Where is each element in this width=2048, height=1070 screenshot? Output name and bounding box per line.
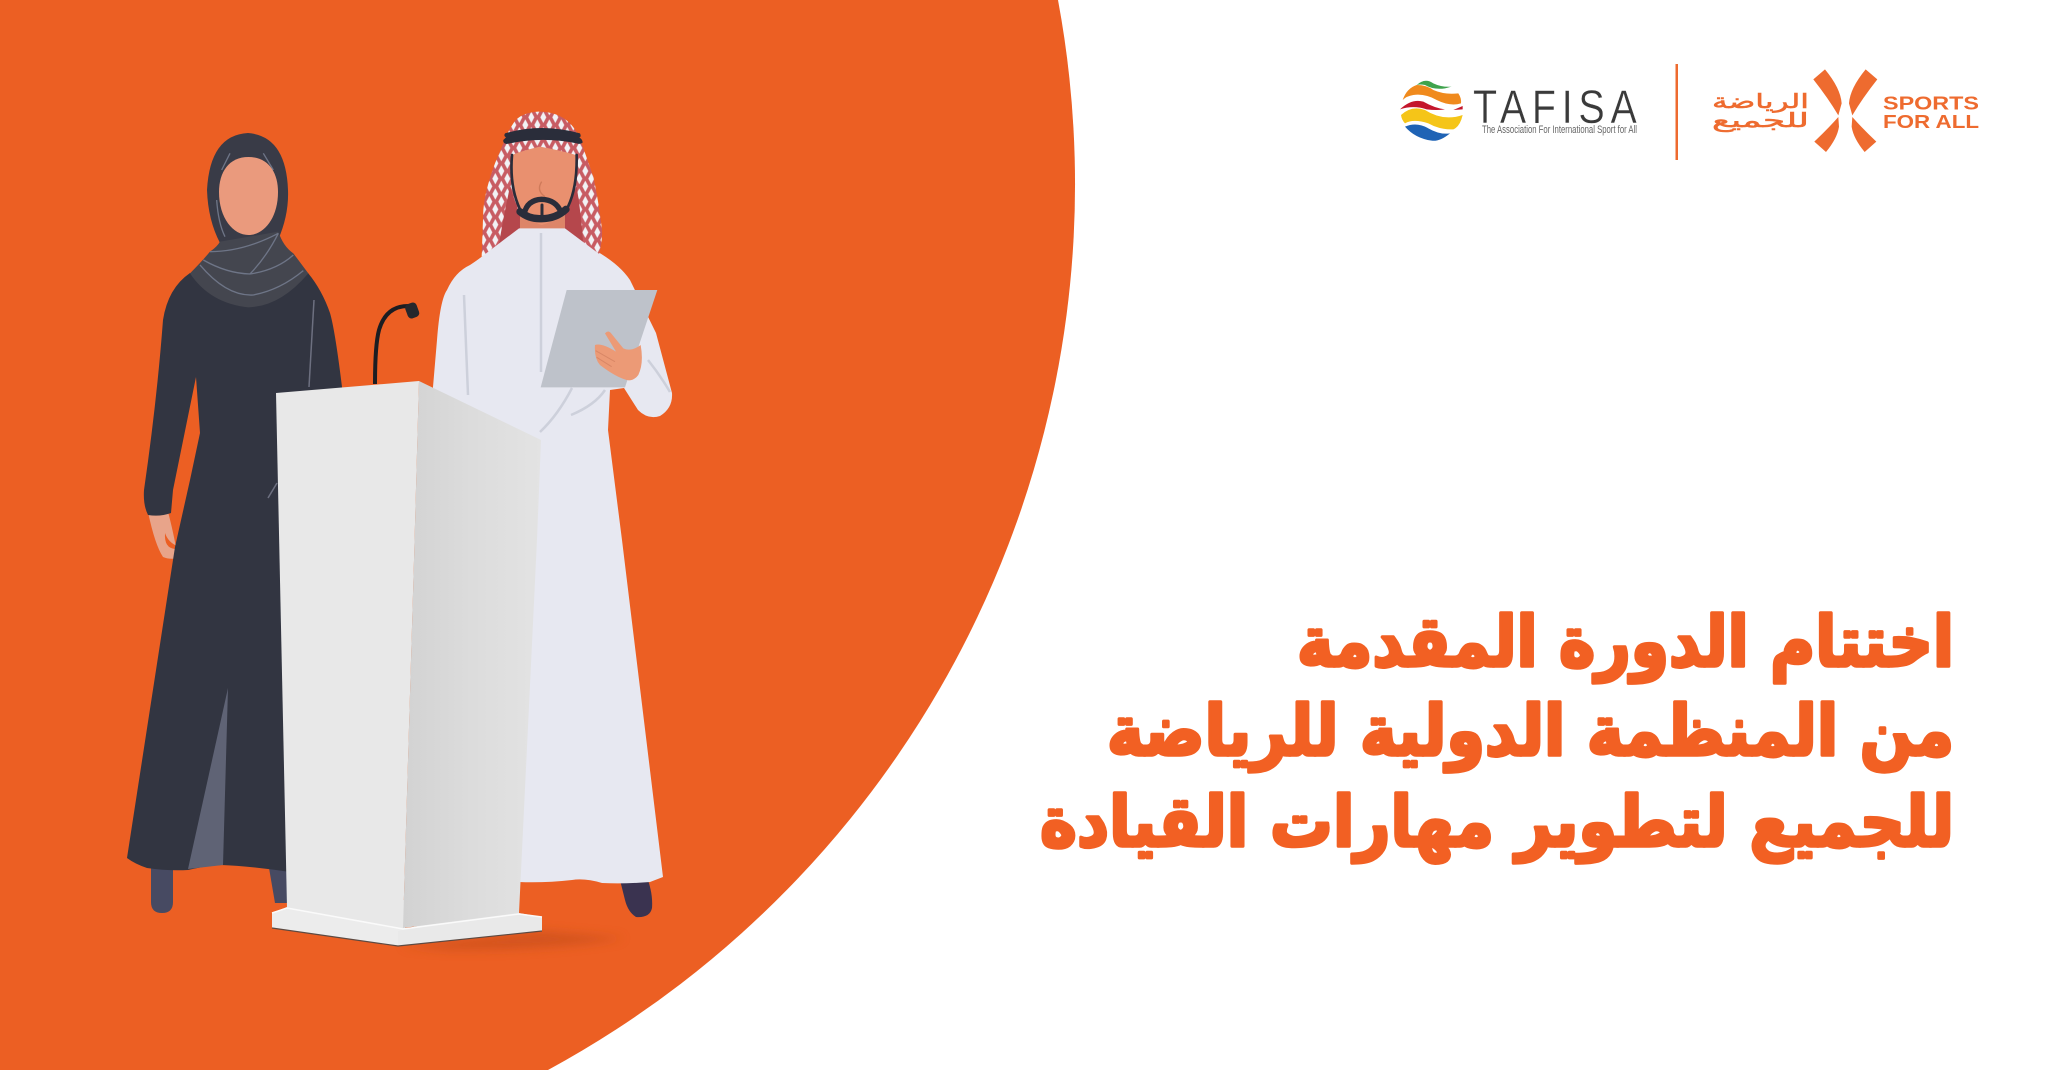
logo: Arabic name: [1712, 89, 1809, 132]
scarf fold lines: [200, 153, 303, 295]
heading: من المنظمة الدولية للرياضة: [1107, 690, 1954, 772]
figure: woman in abaya: [127, 133, 342, 913]
man hand: [595, 331, 642, 380]
logo: Arabic name: الرياضة: [1712, 89, 1809, 113]
logo: TAFISA tagline: The Association For International Sport for All: [1482, 124, 1637, 136]
figure: man in thobe: [433, 112, 672, 917]
background: orange circle: [0, 0, 1075, 1070]
man head: [470, 112, 618, 268]
nose line: [539, 182, 545, 197]
podium base: [272, 900, 542, 946]
podium base top edge highlight: [272, 908, 542, 929]
podium: [272, 381, 542, 946]
man shoe: [620, 880, 652, 917]
heading: اختتام الدورة المقدمة: [1297, 601, 1954, 684]
abaya fold lines: [268, 300, 314, 498]
woman abaya: [127, 273, 342, 872]
man face: [512, 147, 576, 225]
ghutra: [482, 112, 602, 257]
logos: [1400, 64, 1979, 160]
collar: [470, 228, 618, 268]
podium shadow: [400, 931, 625, 950]
woman shoes: [151, 868, 289, 913]
paper and hand: [541, 290, 657, 387]
woman hijab: [207, 133, 288, 262]
woman scarf: [190, 232, 308, 307]
logo: Sports for All X mark: [1813, 69, 1877, 152]
logo: TAFISA wordmark: TAFISA: [1473, 82, 1637, 134]
illustration: speakers at podium: [127, 112, 672, 950]
man beard: [511, 155, 577, 221]
divider: [1676, 64, 1678, 160]
logo: Arabic name: للجميع: [1712, 108, 1809, 132]
finger lines: [596, 351, 615, 367]
podium front face: [276, 381, 419, 928]
logo: English name: SPORTS: [1883, 92, 1979, 114]
man thobe: [433, 228, 672, 883]
ghutra inner shadow: [498, 187, 583, 248]
microphone: [375, 301, 420, 384]
woman scarf and hijab lines: [190, 153, 308, 307]
paper sheet: [541, 290, 657, 387]
heading: [1040, 601, 1954, 863]
woman hand: [148, 512, 178, 559]
logo: English name: FOR ALL: [1883, 111, 1979, 132]
heading: للجميع لتطوير مهارات القيادة: [1040, 781, 1954, 863]
woman face: [219, 157, 278, 235]
neck: [520, 210, 565, 230]
logo: English name: [1883, 92, 1979, 132]
abaya slit: [188, 688, 228, 869]
agal headband: [503, 128, 583, 144]
logo: TAFISA globe: [1400, 81, 1463, 141]
thobe fold lines: [464, 233, 670, 432]
podium side face: [403, 381, 541, 928]
